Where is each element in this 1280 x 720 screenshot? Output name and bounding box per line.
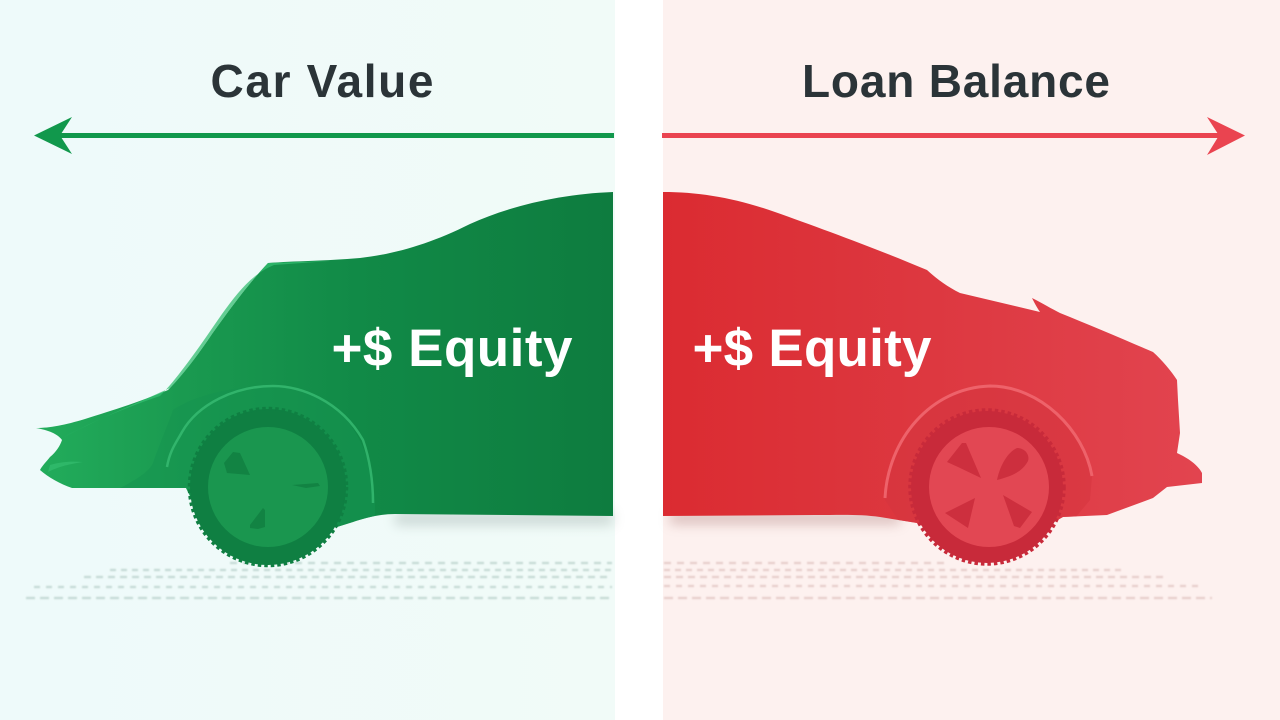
car: green front half [36, 192, 613, 566]
panel: loan balance background [663, 0, 1280, 720]
car shadow: left [395, 512, 613, 525]
car body: red [663, 192, 1202, 530]
label: red equity: +$ Equity [692, 319, 932, 378]
highlight: hood edge [62, 261, 330, 438]
arrow: car value pointing left [34, 117, 614, 154]
label: green equity: +$ Equity [332, 319, 573, 378]
wheel arch [898, 516, 1076, 526]
heading: Car Value: Car Value [210, 55, 434, 107]
ground texture: left [26, 563, 612, 598]
panel: car value background [0, 0, 615, 720]
car: red front half [663, 192, 1202, 564]
car body: green [36, 192, 613, 527]
car shadow: right [670, 512, 900, 524]
tire [190, 408, 346, 566]
wheel arch [186, 488, 375, 527]
heading: Loan Balance: Loan Balance [802, 55, 1110, 107]
highlight: front bumper crease [48, 462, 83, 472]
hub with spokes [208, 427, 328, 547]
tire [910, 410, 1064, 564]
wheel arch highlight [885, 386, 1092, 498]
hub with spokes [929, 427, 1049, 547]
ground texture: right [664, 563, 1212, 598]
wheel arch highlight [167, 386, 373, 503]
arrow: loan balance pointing right [662, 117, 1245, 155]
